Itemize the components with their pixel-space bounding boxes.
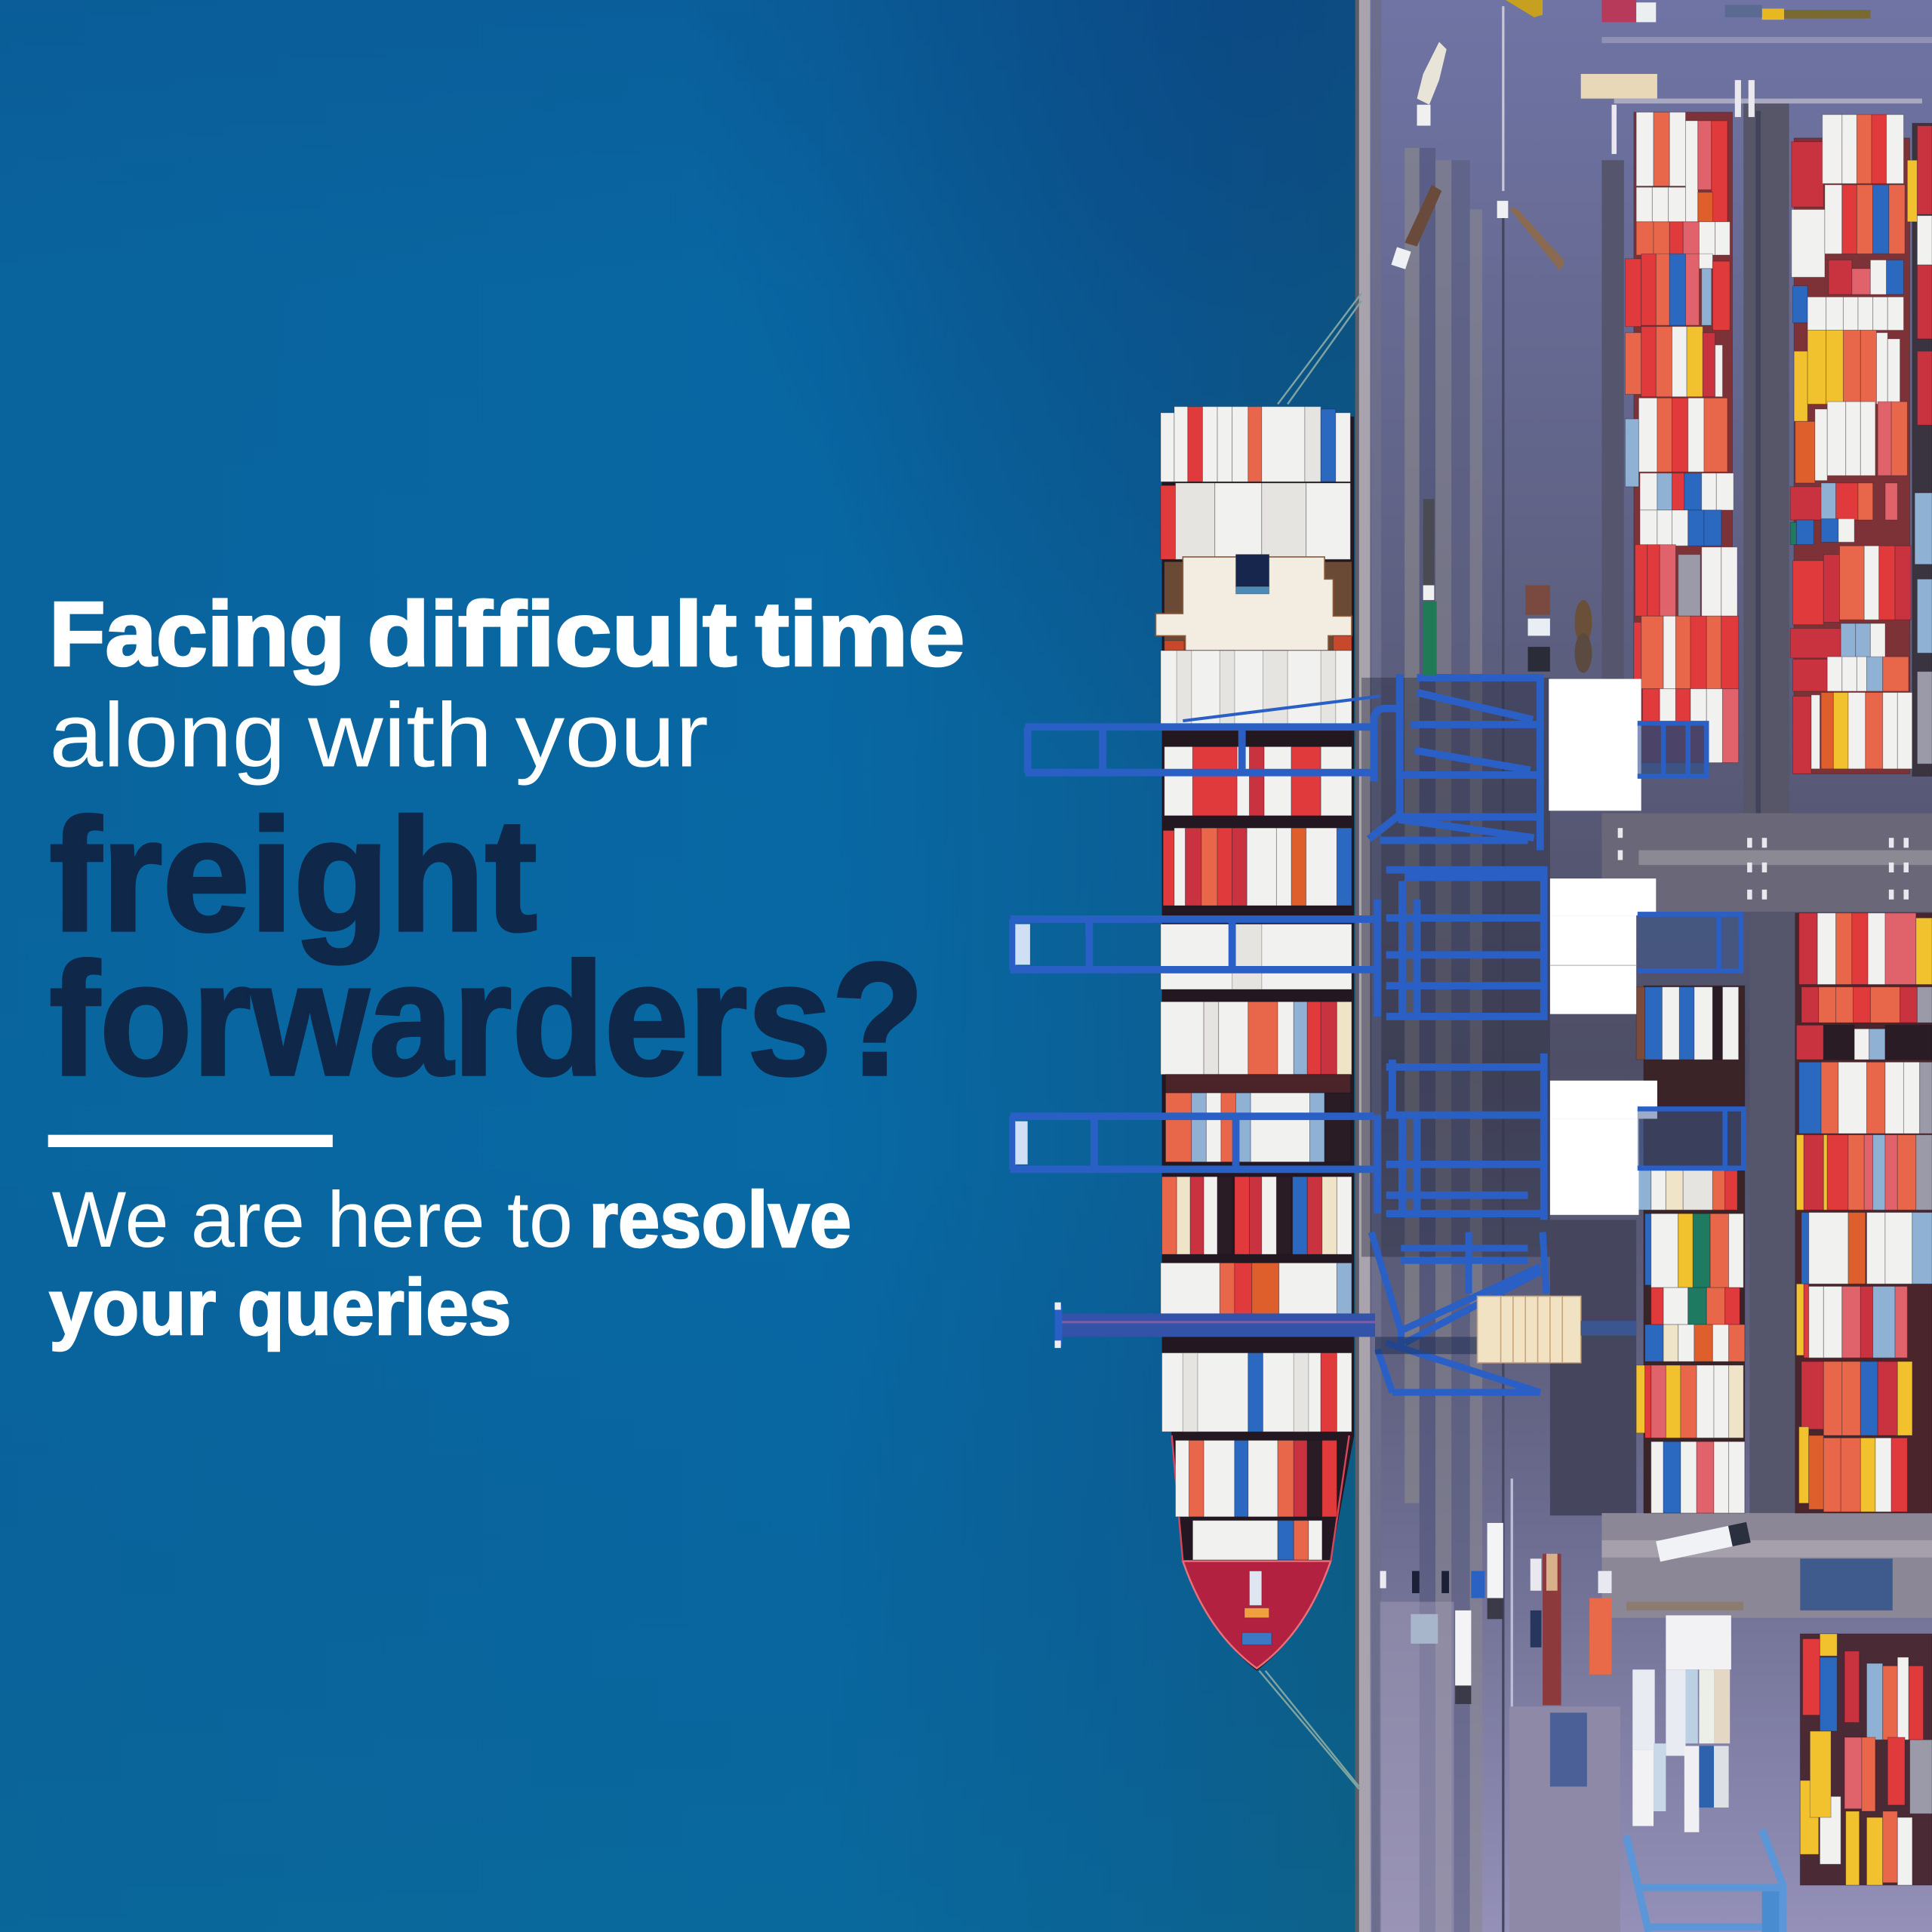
ship containers: bay 9 [1162, 1177, 1177, 1254]
road dash markings [1612, 80, 1909, 900]
heading: Facing difficult time [49, 583, 964, 685]
ship containers: bay 13 [1192, 1521, 1278, 1560]
ship containers: bay 10 [1161, 1263, 1220, 1315]
background: sea [0, 0, 1361, 1932]
heading: Facing difficult time: Facing [49, 583, 345, 685]
top quay vehicles [1391, 0, 1870, 271]
ship containers: bay 2 [1161, 485, 1176, 559]
crane 1 [1025, 674, 1706, 851]
ship containers: bay 4 [1164, 746, 1192, 816]
divider rule [48, 1135, 333, 1147]
ship containers: bay 12 [1176, 1441, 1189, 1517]
heading: freight: freight [49, 786, 537, 964]
ship superstructure [1164, 561, 1352, 651]
crane 2 [1011, 866, 1741, 1020]
mooring lines [1260, 294, 1361, 1789]
bottom quay vehicles [1380, 1522, 1751, 1706]
subheading: We are here to resolve your queries: We are here to [52, 1176, 573, 1264]
ship containers: bay 6 [1161, 924, 1352, 989]
heading: Facing difficult time: difficult [368, 583, 737, 685]
crane 4 [1055, 1232, 1636, 1392]
heading: along with your [49, 685, 709, 786]
subheading: We are here to resolve your queries: your queries [49, 1263, 512, 1352]
bottom yard trailers [1626, 1601, 1743, 1832]
container ship [1155, 407, 1354, 1671]
ship containers: bay 1 [1161, 413, 1174, 481]
ship containers: bay 8 [1165, 1075, 1350, 1093]
bottom right colourful container stack [1800, 1634, 1932, 1885]
heading: along with your: your [515, 685, 709, 786]
subheading: We are here to resolve your queries: resolve [589, 1176, 851, 1264]
heading: Facing difficult time: time [755, 583, 964, 685]
yard container stack: column E [1636, 986, 1745, 1513]
yard container stack: column A [1625, 112, 1739, 763]
ship containers: bay 5 [1163, 830, 1174, 906]
subheading: We are here to resolve your queries [49, 1176, 851, 1352]
bottom crane [1626, 1829, 1783, 1932]
yard container stack: column D [1795, 913, 1932, 1513]
heading: along with your: with [307, 685, 493, 786]
ship containers: bay 11 [1162, 1353, 1248, 1432]
mid quay vehicles and equipment [1423, 499, 1592, 675]
yard container stack: column B [1790, 115, 1912, 774]
crane 3 [1011, 1054, 1743, 1220]
ship hull [1162, 417, 1354, 1671]
yard container stack: right edge column [1907, 123, 1932, 777]
ship containers: bay 7 [1161, 1001, 1204, 1075]
heading: forwarders?: forwarders? [49, 930, 924, 1109]
background: port quay [1355, 0, 1932, 1932]
ship containers: bay 3 [1161, 651, 1352, 727]
heading: along with your: along [49, 685, 286, 786]
